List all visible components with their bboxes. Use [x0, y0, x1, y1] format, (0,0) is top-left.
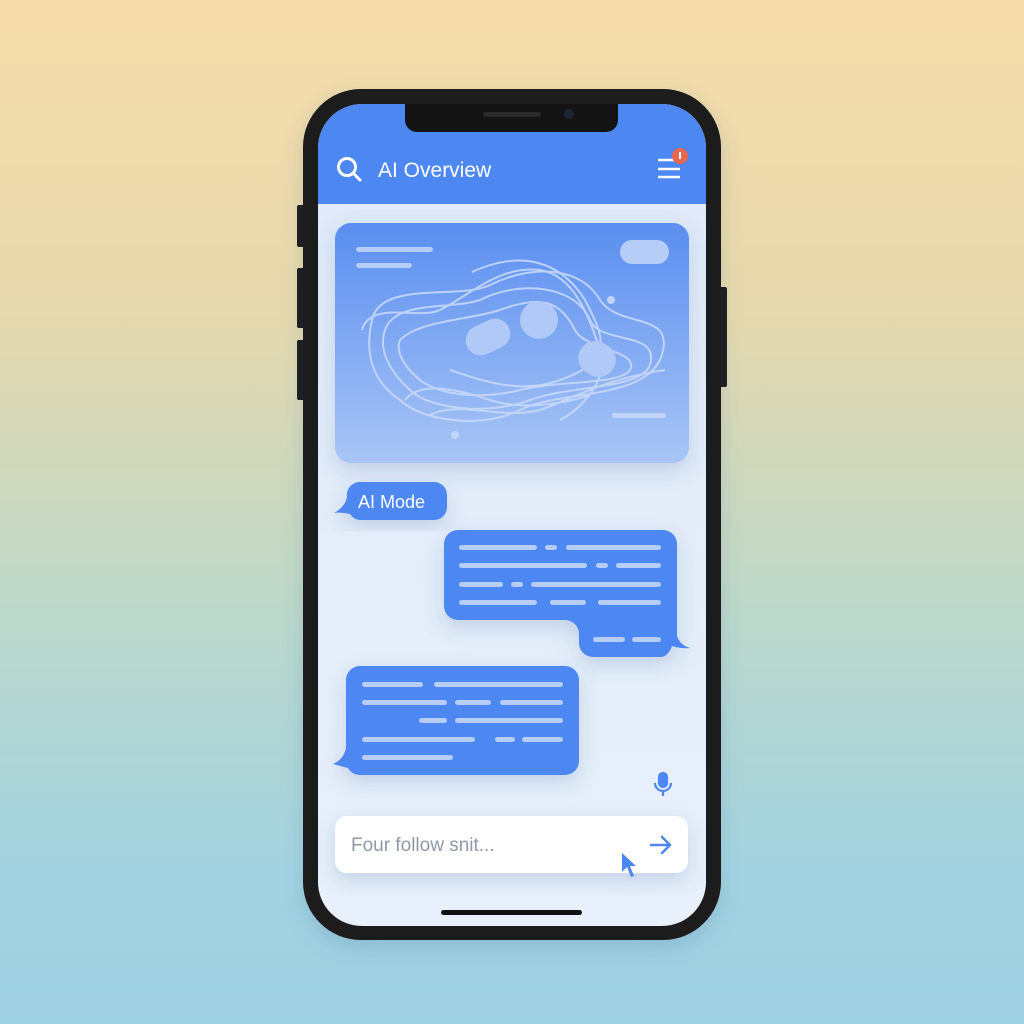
input field: Four follow snit...	[351, 835, 495, 856]
icon: cursor	[622, 853, 636, 877]
header bar	[318, 104, 706, 204]
bubble: AI Mode: AI Mode	[358, 492, 425, 512]
icon: menu with badge	[658, 148, 688, 177]
icon: send arrow	[651, 837, 670, 853]
phone body	[297, 89, 727, 940]
header title: AI Overview	[378, 159, 492, 182]
hero card illustration	[335, 223, 689, 463]
notch	[405, 104, 618, 132]
icon: microphone	[655, 773, 671, 796]
bubble: AI Mode	[334, 482, 447, 520]
bubble: incoming message	[333, 666, 579, 775]
bubble: reply message	[444, 530, 690, 657]
input field	[335, 816, 688, 877]
icon: search	[338, 158, 360, 180]
home indicator	[441, 910, 582, 915]
